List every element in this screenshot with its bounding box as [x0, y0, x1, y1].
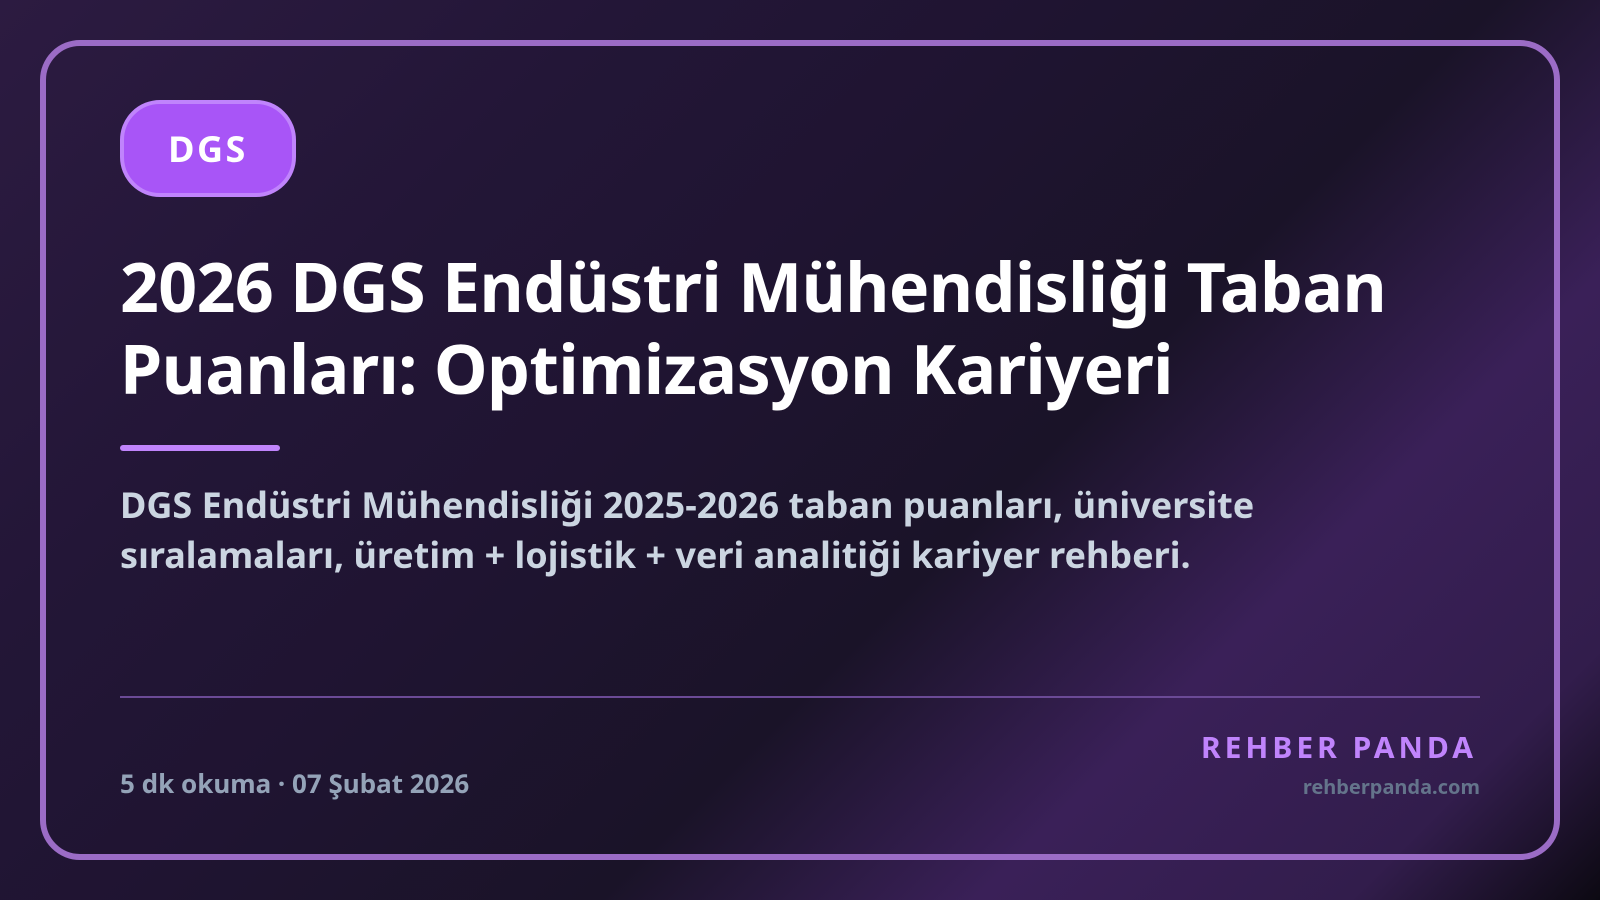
- subtitle text: DGS Endüstri Mühendisliği 2025-2026 taban puanları, üniversite: [120, 480, 1254, 529]
- brand name: REHBER PANDA: [1201, 726, 1477, 767]
- subtitle text: sıralamaları, üretim + lojistik + veri analitiği kariyer rehberi.: [120, 530, 1191, 579]
- reading time and date: 5 dk okuma · 07 Şubat 2026: [120, 765, 469, 801]
- accent bar: [120, 445, 280, 451]
- badge: DGS: [120, 100, 296, 197]
- title: Puanları: Optimizasyon Kariyeri: [120, 321, 1173, 414]
- title: 2026 DGS Endüstri Mühendisliği Taban: [120, 239, 1386, 332]
- brand website: rehberpanda.com: [1303, 773, 1480, 800]
- subtitle text: [120, 480, 1254, 579]
- footer divider: [120, 696, 1480, 698]
- badge: DGS: DGS: [168, 124, 248, 173]
- title: [120, 239, 1386, 414]
